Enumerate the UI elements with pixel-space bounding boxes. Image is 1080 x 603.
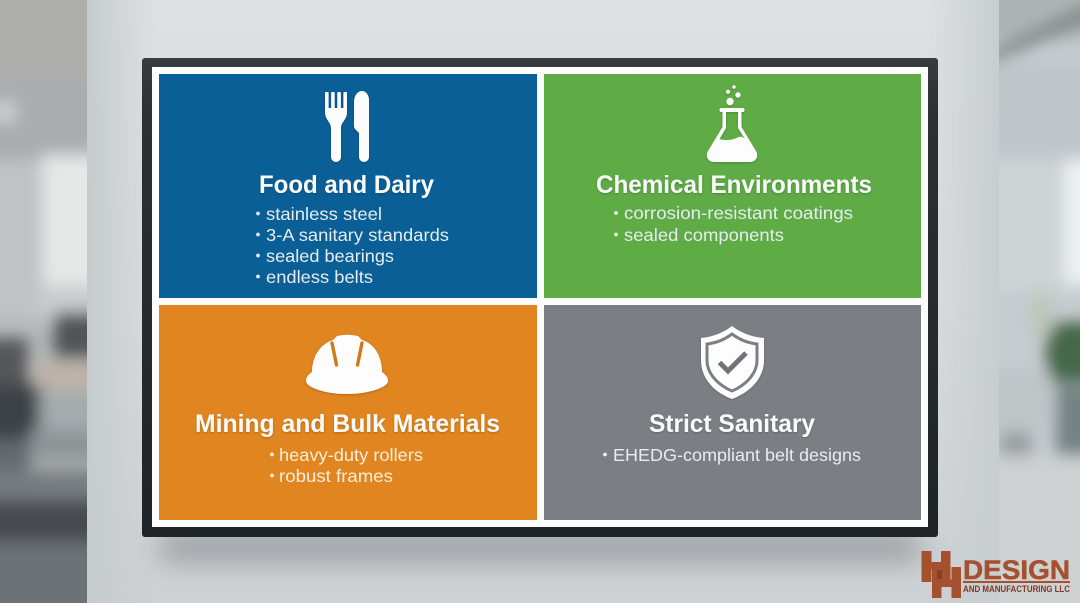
bullet list	[270, 445, 423, 486]
panel background	[159, 305, 537, 520]
heading: Mining and Bulk Materials	[195, 410, 500, 438]
panel background	[544, 74, 921, 298]
blurred office background right	[999, 0, 1080, 603]
heading: Food and Dairy	[259, 171, 434, 199]
icon: flask with bubbles	[707, 85, 757, 162]
icon: hard hat	[306, 335, 388, 394]
panel background	[159, 74, 537, 298]
heading: Chemical Environments	[596, 171, 872, 199]
bullet list	[614, 203, 853, 245]
bullet list: EHEDG-compliant belt designs	[613, 445, 861, 465]
bullet list: endless belts	[266, 267, 373, 287]
bullet list: corrosion-resistant coatings	[624, 203, 853, 223]
screen background	[152, 67, 928, 527]
heading: Strict Sanitary	[649, 410, 815, 438]
monitor	[142, 58, 938, 537]
bullet list: stainless steel	[266, 204, 382, 224]
bullet list: sealed bearings	[266, 246, 394, 266]
monitor frame	[142, 58, 938, 537]
bullet list: 3-A sanitary standards	[266, 225, 449, 245]
panel: food and dairy	[159, 74, 537, 298]
logo: H+H Design and Manufacturing LLC	[922, 551, 1070, 598]
panel: strict sanitary	[544, 305, 921, 520]
bullet list: sealed components	[624, 225, 784, 245]
icon: fork and knife	[325, 91, 369, 162]
monitor shadow	[160, 532, 920, 562]
panel: chemical environments	[544, 74, 921, 298]
icon: shield with check	[701, 326, 764, 399]
logo mark	[922, 551, 961, 598]
panel background	[544, 305, 921, 520]
bullet list: robust frames	[279, 466, 393, 486]
panel: mining and bulk materials	[159, 305, 537, 520]
logo rule	[963, 581, 1070, 583]
blurred office background left	[0, 0, 87, 603]
bullet list: heavy-duty rollers	[279, 445, 423, 465]
bullet list	[256, 204, 449, 287]
logo wordmark: DESIGN	[963, 555, 1070, 585]
